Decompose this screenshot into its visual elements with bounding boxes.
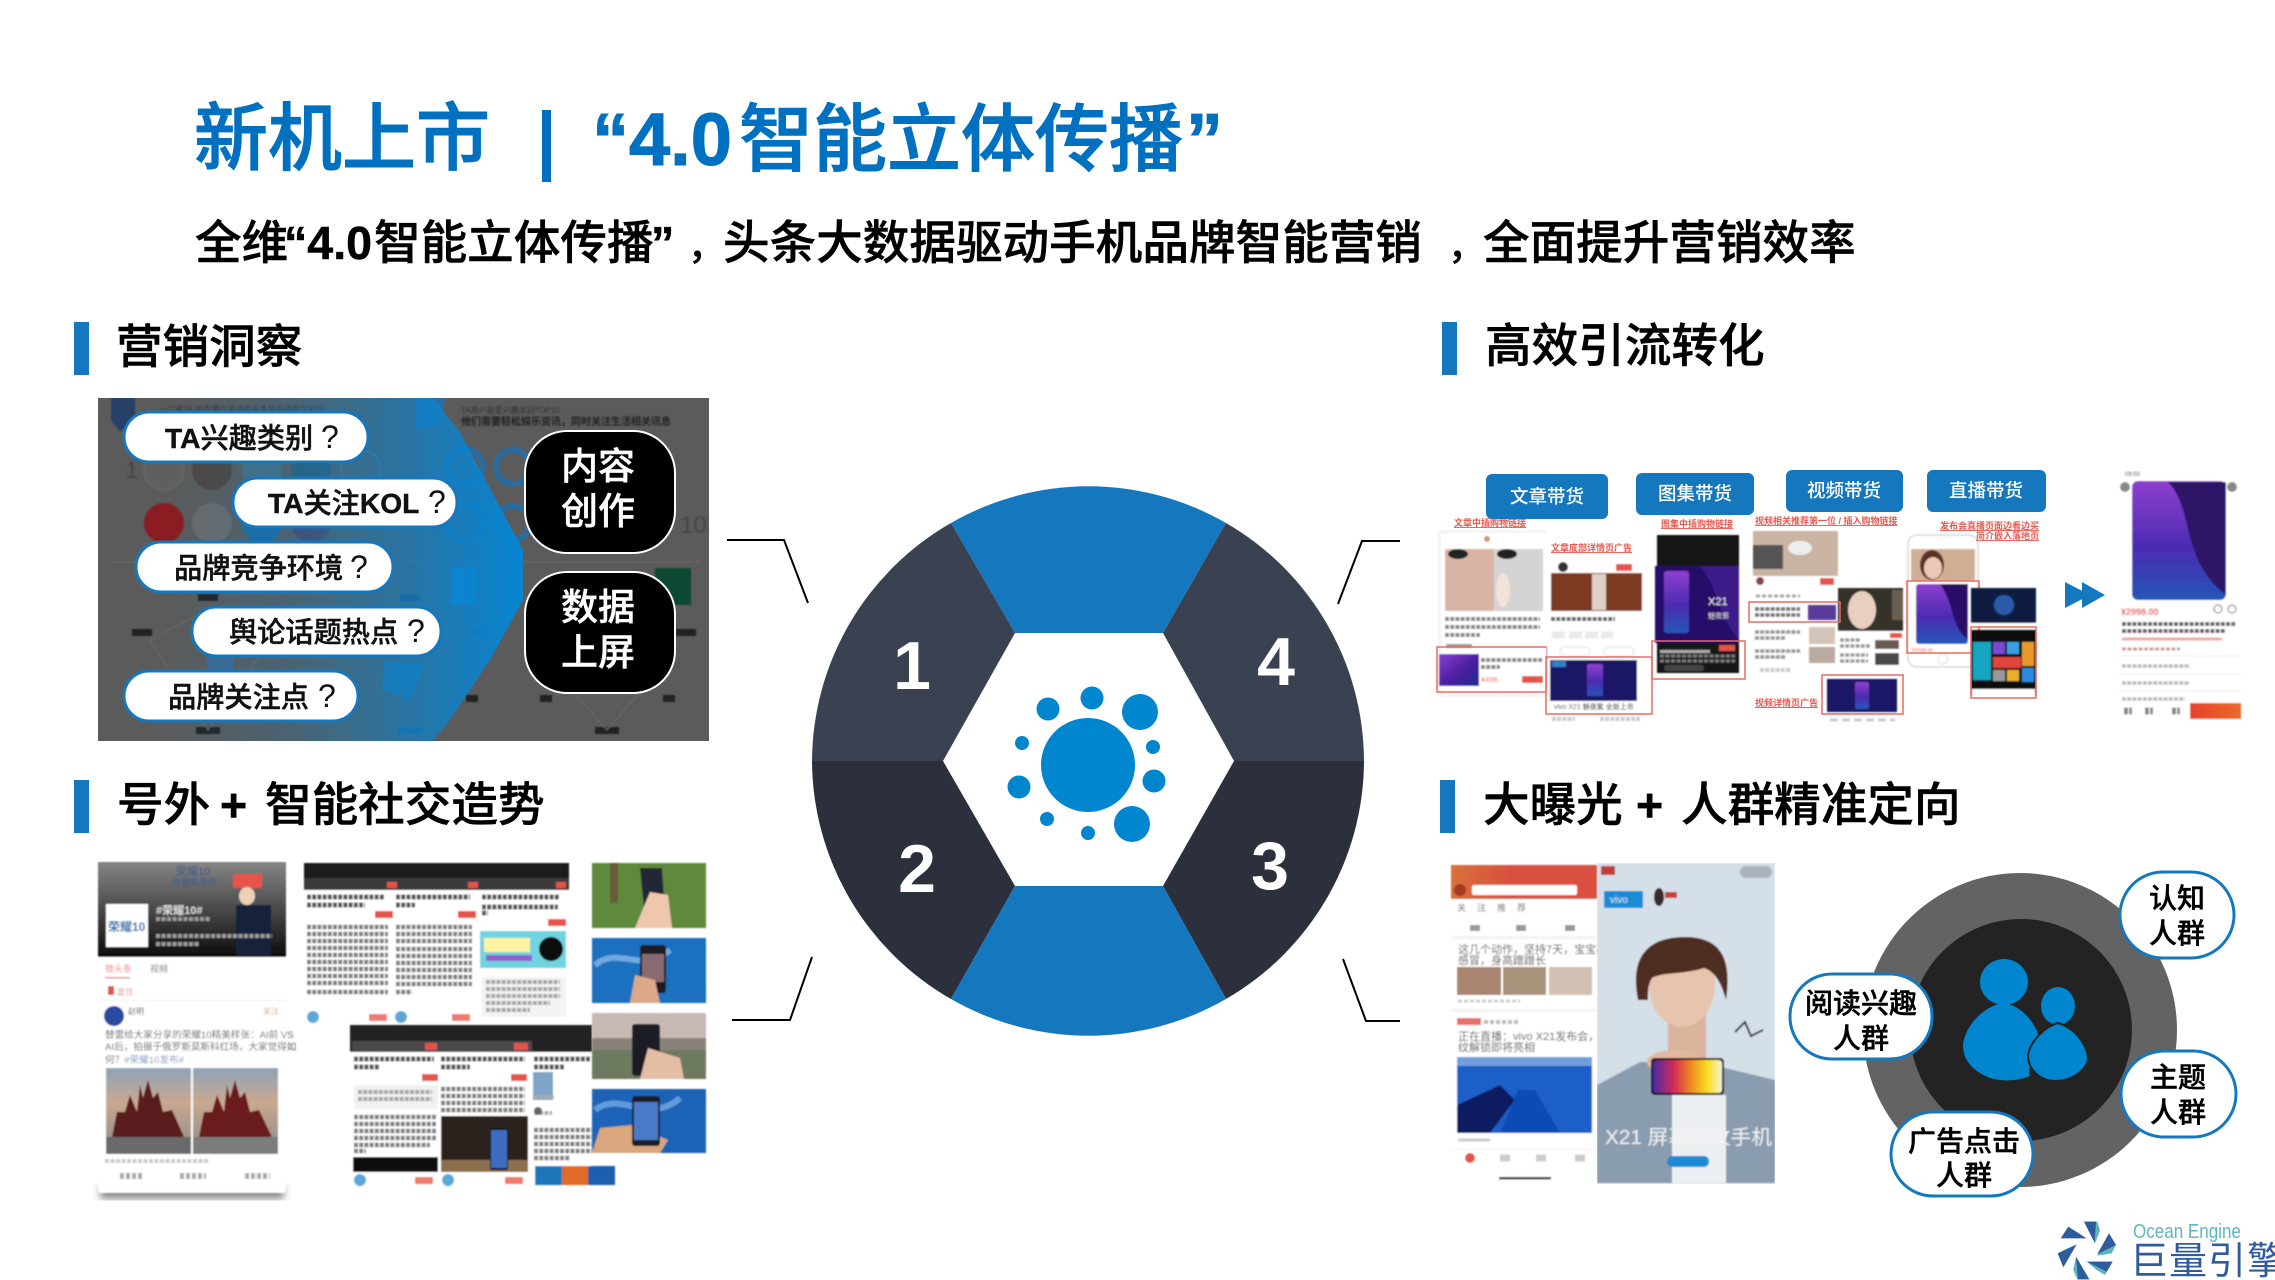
- article screenshots set 2: [350, 1025, 615, 1186]
- pill: TA关注KOL: 关注KOL: [303, 487, 419, 519]
- pill: 品牌竞争环境: ?: [350, 549, 368, 585]
- red annotations: 发布会直播页面边看边买: [1940, 520, 2039, 531]
- title: 新机上市: [194, 97, 490, 180]
- article screenshots set 1: [304, 863, 569, 1025]
- wheel numbers: 1: [893, 628, 931, 704]
- pill: 舆论话题热点: [192, 607, 441, 656]
- news feed screenshot: 正在直播：vivo X21发布会，屏下指: [1458, 1029, 1632, 1043]
- connector lines: [727, 540, 1400, 1021]
- subtitle: ，: [688, 226, 724, 267]
- news feed screenshot: [1451, 865, 1632, 1183]
- icon: dots: [1008, 686, 1166, 842]
- bubble: 主题人群: 人群: [2150, 1097, 2206, 1128]
- phone screenshot: 荣耀10 topic: [98, 862, 296, 1199]
- phone screenshot: 荣耀10 topic: AI后，拍摄于俄罗斯莫斯科红场，大家觉得如: [105, 1041, 296, 1053]
- gallery screen: [1655, 535, 1739, 673]
- subtitle: 智能立体传播: [374, 217, 654, 269]
- gallery screen: 魅夜紫: [1708, 611, 1729, 620]
- phone screenshot: 荣耀10 topic: 荣耀10: [108, 919, 146, 934]
- subtitle: 头条大数据驱动手机品牌智能营销: [723, 217, 1422, 269]
- insight background screenshot: 一二线28-30岁用户关注的头条号互动度TOP10: [159, 404, 325, 414]
- heading: 高效引流转化: 高效引流转化: [1485, 320, 1765, 372]
- article detail ad screen: [1547, 558, 1652, 723]
- heading: 营销洞察: 营销洞察: [116, 321, 302, 373]
- card: 内容创作: 内容: [561, 446, 635, 487]
- heading: 大曝光 + 人群精准定向: 人群精准定向: [1681, 779, 1961, 831]
- bubble: 认知人群: 人群: [2149, 918, 2205, 949]
- subtitle: ”: [651, 217, 674, 269]
- card: 数据上屏: 数据: [561, 587, 635, 628]
- red annotations: [1454, 515, 2039, 708]
- bubble: 认知人群: [2120, 872, 2234, 958]
- card: 数据上屏: [525, 572, 675, 693]
- bubble: 认知人群: 认知: [2149, 883, 2205, 914]
- segment 3: [1163, 761, 1364, 999]
- news feed screenshot: 这几个动作，坚持7天，宝宝再不: [1458, 942, 1618, 956]
- vivo ad poster: [1597, 863, 1775, 1184]
- card: 内容创作: [525, 431, 675, 553]
- bubble: 广告点击人群: 人群: [1936, 1160, 1992, 1191]
- panel: exposure and targeting: [1451, 863, 2236, 1196]
- wheel numbers: 3: [1251, 828, 1289, 904]
- phone screenshot: 荣耀10 topic: 荣耀10: [176, 865, 210, 878]
- wheel numbers: 2: [898, 831, 936, 907]
- title: [194, 97, 1223, 182]
- tag: 视频带货: 视频带货: [1807, 480, 1881, 501]
- article screen: [1438, 530, 1547, 697]
- live stream phone: [1908, 535, 1978, 667]
- subtitle: “4.0: [284, 217, 372, 269]
- pill: TA兴趣类别: [124, 412, 368, 462]
- phone screenshot: 荣耀10 topic: 关注: [263, 1006, 279, 1016]
- live stream phone: ¥2998.00: [1912, 648, 1933, 654]
- phone screenshot: 荣耀10 topic: @摄影革命: [172, 876, 217, 887]
- bubble: 主题人群: [2121, 1051, 2236, 1137]
- phone screenshot: 荣耀10 topic: #荣耀10#: [156, 903, 202, 917]
- panel: marketing insight: [98, 398, 709, 741]
- video thumbnails: [592, 863, 706, 1153]
- red annotations: 简介嵌入落地页: [1976, 530, 2039, 541]
- pill: 舆论话题热点: ?: [407, 613, 425, 649]
- logo: Ocean Engine: [2058, 1221, 2275, 1280]
- tag: 文章带货: [1486, 474, 1608, 519]
- segment 2: [812, 761, 1015, 999]
- center wheel: [812, 486, 1364, 1036]
- logo: Ocean Engine: Ocean Engine: [2133, 1221, 2241, 1243]
- bubble: 广告点击人群: [1891, 1112, 2033, 1196]
- title: ”: [1186, 98, 1223, 181]
- segment top: [951, 486, 1226, 633]
- phone screenshot: 荣耀10 topic: 何？#荣耀10发布#: [105, 1054, 185, 1066]
- pill: TA关注KOL: [233, 478, 457, 527]
- pill: 舆论话题热点: 舆论话题热点: [229, 616, 398, 648]
- vivo ad poster: X21 屏幕指纹手机: [1605, 1126, 1772, 1149]
- pill: 品牌竞争环境: [136, 542, 393, 592]
- insight background screenshot: 他们需要轻松娱乐资讯，同时关注生活相关讯息: [461, 415, 671, 428]
- audience circle: [1790, 872, 2236, 1196]
- pill: TA兴趣类别: ?: [321, 419, 339, 455]
- tag: 文章带货: 文章带货: [1510, 486, 1584, 507]
- pill: 品牌竞争环境: 品牌竞争环境: [174, 552, 343, 584]
- product detail phone: ¥2998.00: [2121, 607, 2159, 617]
- heading: 大曝光 + 人群精准定向: 大曝光: [1483, 779, 1623, 831]
- news feed screenshot: 感冒，身高蹭蹭长: [1458, 953, 1546, 967]
- bubble: 阅读兴趣人群: 人群: [1833, 1023, 1889, 1054]
- subtitle: ，: [1448, 226, 1484, 267]
- red annotations: 文章底部详情页广告: [1551, 542, 1632, 553]
- product detail phone: [2118, 468, 2241, 720]
- pill: 品牌关注点: [124, 671, 358, 721]
- pill: TA关注KOL: TA: [268, 487, 303, 519]
- tag: 图集带货: [1636, 473, 1754, 515]
- news feed screenshot: 纹解锁即将亮相: [1458, 1040, 1535, 1054]
- pill: 品牌关注点: ?: [318, 678, 336, 714]
- tag: 直播带货: [1927, 470, 2046, 512]
- article screen: ¥498: [1481, 675, 1498, 684]
- heading: 号外 + 智能社交造势: 智能社交造势: [265, 779, 545, 831]
- title: “4.0: [592, 98, 732, 181]
- tag: 图集带货: 图集带货: [1658, 483, 1732, 504]
- card: 内容创作: 创作: [561, 491, 635, 532]
- card: 数据上屏: 上屏: [561, 632, 635, 673]
- pill: TA兴趣类别: TA: [165, 422, 200, 454]
- product detail phone: 09:50: [2125, 472, 2141, 478]
- segment 4: [1163, 523, 1364, 761]
- insight background screenshot: 1: [125, 457, 138, 484]
- red annotations: 视频详情页广告: [1755, 697, 1818, 708]
- phone screenshot: 荣耀10 topic: 置顶: [117, 988, 133, 997]
- insight background screenshot: 10: [680, 512, 707, 539]
- icon: pinwheel: [2058, 1222, 2116, 1279]
- title: 智能立体传播: [739, 98, 1183, 181]
- heading: 号外 + 智能社交造势: 号外: [117, 779, 210, 831]
- red annotations: 文章中插购物链接: [1454, 517, 1526, 528]
- news feed screenshot: 关注推荐: [1457, 902, 1537, 913]
- phone screenshot: 荣耀10 topic: 微头条: [105, 963, 132, 974]
- heading: 号外 + 智能社交造势: [74, 779, 545, 833]
- icon: people: [1963, 959, 2088, 1081]
- insight background screenshot: TA用户最爱兴趣类别TOP10: [461, 405, 560, 415]
- bubble: 主题人群: 主题: [2150, 1062, 2206, 1093]
- red annotations: 视频相关推荐第一位 / 插入购物链接: [1755, 515, 1898, 526]
- pill: TA兴趣类别: 兴趣类别: [200, 422, 313, 454]
- panel: efficient conversion: [1437, 468, 2241, 723]
- heading: 大曝光 + 人群精准定向: [1440, 779, 1961, 833]
- arrow: double: [2065, 582, 2105, 608]
- wheel numbers: [893, 624, 1295, 907]
- red annotations: 图集中插购物链接: [1661, 518, 1733, 529]
- insight background screenshot: 1: [428, 457, 441, 484]
- subtitle: 全面提升营销效率: [1483, 217, 1856, 269]
- bubble: 广告点击人群: 广告点击: [1908, 1126, 2020, 1157]
- phone screenshot: 荣耀10 topic: 赵明: [128, 1006, 144, 1016]
- tag: 直播带货: 直播带货: [1949, 480, 2023, 501]
- article detail ad screen: vivo X21 魅夜紫 全新上市: [1554, 702, 1634, 711]
- panel: outdoor and smart social: [98, 862, 706, 1199]
- wheel numbers: 4: [1257, 624, 1295, 700]
- heading: 大曝光 + 人群精准定向: +: [1636, 779, 1663, 831]
- vivo ad poster: vivo: [1610, 895, 1628, 906]
- bubble: 阅读兴趣人群: [1790, 974, 1932, 1059]
- bubble: 阅读兴趣人群: 阅读兴趣: [1805, 988, 1917, 1019]
- gallery screen: X21: [1708, 596, 1728, 608]
- phone screenshot: 荣耀10 topic: 视频: [150, 963, 168, 974]
- heading: 号外 + 智能社交造势: +: [220, 779, 247, 831]
- segment 1: [812, 523, 1015, 761]
- subtitle: 全维: [195, 217, 288, 269]
- tag: 视频带货: [1786, 470, 1903, 512]
- pill: 品牌关注点: 品牌关注点: [168, 681, 309, 713]
- app screen: [1971, 588, 2036, 697]
- segment bottom: [951, 886, 1226, 1036]
- pill: TA关注KOL: ?: [428, 484, 446, 520]
- phone screenshot: 荣耀10 topic: 替雷给大家分享的荣耀10精美样张：AI前 VS: [105, 1029, 294, 1041]
- insight background screenshot: [98, 398, 709, 741]
- video screens: [1753, 531, 1903, 720]
